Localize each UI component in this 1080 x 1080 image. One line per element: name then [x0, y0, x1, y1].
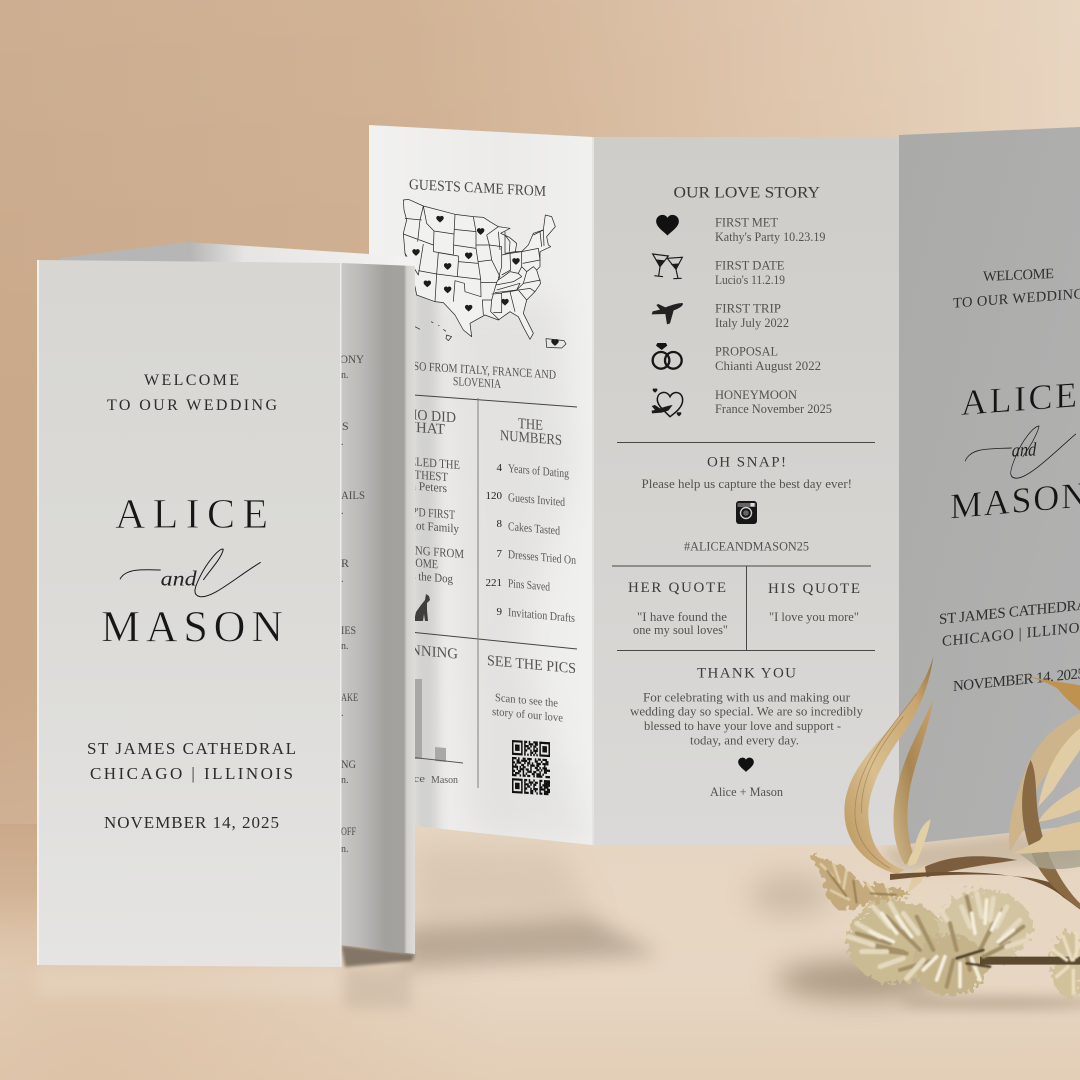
timeline: first met: Kathy's Party 10.23.19 [715, 230, 826, 244]
section: who did what: Boris the Dog [392, 567, 453, 586]
section: who did what [382, 406, 464, 586]
section: the numbers: 4 [496, 462, 502, 474]
panel: folded program inner flap [60, 242, 415, 954]
text: inner flap schedule fragments: AKE [341, 690, 358, 704]
text: inner flap schedule fragments: n. [341, 641, 348, 652]
map of the USA with hearts [403, 199, 566, 348]
section: who did what: WHO DID [394, 406, 456, 426]
script: and: and [161, 568, 197, 590]
section: wedding planning bar chart: Alice [397, 773, 425, 785]
text: inner flap schedule fragments: S [342, 419, 349, 433]
text: also from Italy, France and Slovenia: SLOVENIA [453, 374, 501, 391]
section: wedding planning bar chart: Mason [431, 774, 458, 786]
names: Alice and Mason: MASON [101, 602, 283, 651]
timeline: honeymoon [715, 388, 832, 416]
section: her quote [628, 580, 728, 637]
text: inner flap schedule fragments: ONY [340, 352, 364, 366]
text: inner flap schedule fragments: NG [341, 757, 356, 771]
section: the numbers: 221 [486, 577, 502, 589]
section: the numbers: 8 [496, 518, 502, 530]
text: inner flap schedule fragments: IES [341, 623, 356, 637]
section: the numbers: 9 [496, 606, 502, 618]
section: thank you: today, and every day. [690, 734, 799, 748]
section: oh snap [642, 455, 852, 554]
section: his quote [768, 581, 860, 624]
timeline: first met [715, 216, 826, 244]
section: see the pics: story of our love [492, 706, 563, 725]
flower heads [847, 890, 1080, 998]
section: who did what: HOME [408, 555, 438, 571]
text: venue and date [939, 596, 1080, 695]
background wall [0, 0, 1080, 830]
section: see the pics: Scan to see the [495, 692, 558, 710]
timeline: honeymoon: HONEYMOON [715, 388, 797, 402]
script: and [120, 549, 261, 597]
text: also from Italy, France and Slovenia [400, 358, 556, 391]
feather plume [810, 855, 910, 910]
section: who did what: WHAT [402, 419, 445, 438]
text: inner flap schedule fragments: . [341, 574, 344, 585]
timeline: first date: Lucio's 11.2.19 [715, 273, 785, 287]
text: inner flap schedule fragments: R [341, 556, 349, 570]
timeline: first date [715, 259, 785, 287]
timeline: proposal [715, 344, 821, 373]
section: the numbers [486, 416, 576, 625]
section: who did what: Elliot Family [400, 517, 459, 536]
grid lines on centre panel [612, 442, 875, 650]
section: see the pics: SEE THE PICS [487, 653, 576, 677]
section: thank you: THANK YOU [697, 666, 796, 682]
section: the numbers: NUMBERS [500, 428, 562, 449]
section: wedding planning bar chart: PLANNING [382, 640, 458, 663]
text: inner flap schedule fragments: n. [341, 844, 348, 855]
section: her quote: one my soul loves" [633, 623, 728, 637]
panel: open brochure left, guest facts [369, 125, 592, 850]
text: inner flap schedule fragments: . [341, 437, 344, 448]
section: who did what: RSVP'D FIRST [392, 503, 455, 522]
section: thank you: Alice + Mason [710, 785, 784, 799]
timeline: first trip [715, 302, 789, 330]
icon: heart with airplane [652, 388, 683, 417]
timeline: first met: FIRST MET [715, 216, 778, 230]
text: welcome [953, 268, 1080, 308]
icon: martini glasses [653, 254, 682, 279]
section: thank you: wedding day so special. We are so incredibly [630, 704, 864, 718]
text: inner flap schedule fragments: OFF [341, 824, 356, 838]
section: the numbers: Guests Invited [508, 490, 565, 509]
icon: heart [656, 215, 679, 235]
section: oh snap: Please help us capture the best day ever! [642, 477, 852, 491]
timeline: first trip: Italy July 2022 [715, 316, 789, 330]
section: who did what: FARTHEST [395, 466, 448, 484]
section: the numbers: THE [518, 416, 543, 434]
section: oh snap: #ALICEANDMASON25 [684, 540, 809, 554]
text: welcome: WELCOME [983, 266, 1054, 285]
leaf cluster [844, 656, 1080, 909]
text: inner flap schedule fragments: n. [341, 775, 348, 786]
section: who did what: TRAVELED THE [382, 452, 460, 472]
panel: open brochure right, cover [899, 127, 1080, 845]
section: her quote: HER QUOTE [628, 580, 726, 596]
timeline: first trip: FIRST TRIP [715, 302, 781, 316]
section: his quote: "I love you more" [769, 610, 859, 624]
table surface [0, 670, 1080, 1080]
timeline: proposal: Chianti August 2022 [715, 359, 821, 373]
reflection of program on table [37, 968, 411, 1008]
script: and: and [1012, 439, 1037, 461]
section: who did what: MISSING FROM [386, 541, 464, 561]
names: Alice and Mason [951, 384, 1080, 518]
panel: open brochure centre, love story [592, 137, 899, 845]
timeline: proposal: PROPOSAL [715, 344, 778, 358]
icon: small heart [738, 758, 754, 772]
text: welcome: WELCOME [144, 372, 239, 389]
section: thank you [630, 666, 864, 799]
icon: wedding rings [653, 343, 682, 369]
section: the numbers: Years of Dating [508, 461, 569, 480]
text: inner flap schedule fragments: . [341, 708, 344, 719]
text: also from Italy, France and Slovenia: ALSO FROM ITALY, FRANCE AND [400, 358, 556, 382]
section: the numbers: 120 [486, 490, 502, 502]
text: venue and date [87, 739, 296, 832]
section: the numbers: Pins Saved [508, 576, 550, 594]
text: inner flap schedule fragments: . [341, 506, 344, 517]
timeline: first date: FIRST DATE [715, 259, 785, 273]
section: the numbers: Dresses Tried On [508, 547, 576, 567]
text: inner flap schedule fragments: n. [341, 370, 348, 381]
section: thank you: blessed to have your love and support - [644, 719, 841, 733]
grid lines on brochure left [400, 394, 577, 788]
section: the numbers: 7 [496, 548, 502, 560]
timeline: honeymoon: France November 2025 [715, 402, 832, 416]
section: see the pics [487, 653, 576, 794]
section: thank you: For celebrating with us and making our [643, 690, 851, 704]
text: welcome: TO OUR WEDDING [107, 397, 277, 414]
names: Alice and Mason: ALICE [115, 492, 268, 538]
table shadows [341, 825, 1080, 1009]
section: who did what: John Peters [394, 477, 447, 495]
heading: guests came from: GUESTS CAME FROM [409, 177, 546, 200]
section: her quote: "I have found the [637, 610, 727, 624]
icon: QR code [512, 741, 550, 794]
decoration: dried plant [810, 656, 1080, 998]
icon: airplane [652, 303, 683, 324]
panel: folded program front cover [37, 260, 342, 967]
heading: our love story: OUR LOVE STORY [674, 184, 820, 202]
section: his quote: HIS QUOTE [768, 581, 860, 597]
icon: sitting dog [414, 594, 430, 621]
text: inner flap schedule fragments: AILS [341, 488, 365, 502]
text: venue and date: ST JAMES CATHEDRAL [87, 739, 296, 758]
section: wedding planning bar chart [382, 640, 463, 786]
text: welcome [107, 372, 277, 414]
section: oh snap: OH SNAP! [707, 455, 786, 471]
text: venue and date: CHICAGO | ILLINOIS [90, 764, 293, 783]
text: venue and date: NOVEMBER 14, 2025 [104, 813, 279, 832]
icon: instagram camera [736, 501, 757, 524]
text: inner flap schedule fragments [340, 352, 365, 855]
names: Alice and Mason [101, 492, 283, 651]
names: Alice and Mason: ALICE [961, 375, 1077, 423]
section: the numbers: Cakes Tasted [508, 519, 560, 538]
section: the numbers: Invitation Drafts [508, 605, 575, 625]
script: and [965, 424, 1076, 480]
